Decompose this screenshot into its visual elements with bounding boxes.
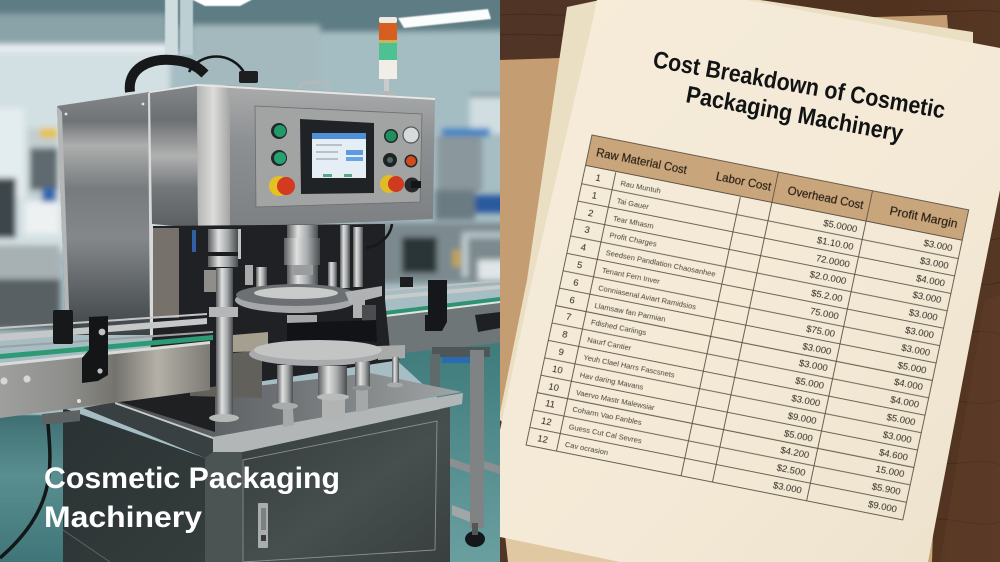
profit margin values: $4.600 [878, 447, 909, 464]
kraft paper left [500, 58, 560, 415]
row numbers: 3 [583, 224, 591, 236]
rotary disc upper [235, 284, 382, 323]
lower bracket [190, 350, 262, 398]
overhead cost values: $2.0.000 [809, 269, 847, 287]
row item labels: Tenant Fern Inver [601, 266, 661, 286]
document heading: Cost Breakdown of Cosmetic [651, 46, 947, 124]
beam connector and cable [0, 410, 80, 558]
overhead cost values: $3.000 [798, 358, 829, 374]
row numbers: 10 [547, 381, 560, 394]
profit margin values: $3.000 [882, 430, 913, 446]
cabinet door handle [258, 503, 268, 548]
right conveyor [377, 277, 500, 353]
row item labels [564, 179, 731, 470]
back plate [153, 228, 179, 318]
control box [150, 84, 435, 228]
overhead cost values: $3.000 [790, 393, 821, 409]
row item labels: Fdished Cariings [590, 317, 647, 337]
row numbers: 5 [576, 260, 583, 271]
control plate [255, 106, 422, 207]
panel: machine photograph [0, 0, 520, 562]
profit margin values: $4.000 [915, 273, 946, 289]
touch screen [300, 119, 374, 194]
floor right [399, 343, 500, 562]
row numbers: 2 [587, 208, 594, 220]
table header band: Labor Cost [715, 169, 773, 194]
profit margin values: $3.000 [923, 238, 953, 254]
rotary disc lower [249, 340, 405, 366]
cable gland cap [239, 71, 258, 83]
mechanism backdrop [150, 224, 400, 386]
row item labels: Guess Cut Cal Sevres [568, 422, 643, 445]
row numbers: 12 [536, 433, 549, 446]
left conveyor [0, 313, 213, 418]
row numbers: 9 [557, 347, 565, 358]
document heading: Packaging Machinery [684, 81, 906, 148]
row item labels: Naurf Cantier [586, 335, 633, 353]
row numbers [536, 172, 604, 446]
row item labels: Coharm Vao Fanbles [572, 405, 643, 427]
title: cosmetic packaging machinery: Machinery [44, 501, 202, 534]
overhead cost values: $3.000 [772, 480, 803, 496]
row numbers: 6 [568, 295, 576, 307]
signal tower light [379, 17, 397, 95]
lower columns [272, 357, 403, 410]
row numbers: 1 [594, 173, 602, 184]
row numbers: 1 [591, 190, 598, 202]
profit margin values: 15.000 [875, 464, 905, 480]
profit margin values: $3.000 [912, 290, 942, 306]
cable: thin black wire [189, 56, 245, 74]
conveyor leg [430, 347, 500, 547]
row item labels: Rau Muntuh [620, 179, 662, 195]
overhead cost values: $1.10.00 [816, 235, 854, 253]
wood desk [500, 0, 1000, 562]
kraft paper bottom [505, 535, 630, 562]
row numbers: 11 [544, 398, 556, 411]
beam plate behind post [233, 332, 268, 352]
ceiling lights [187, 0, 491, 28]
table header band: Profit Margin [888, 204, 959, 231]
dark linkage [287, 320, 377, 342]
cabinet under-edge shadow [120, 392, 215, 432]
row numbers: 12 [540, 416, 553, 428]
overhead cost values: 75.000 [809, 306, 840, 322]
overhead cost values [764, 217, 858, 496]
row item labels: Tear Mhasm [612, 214, 655, 231]
rail bracket rear [53, 310, 73, 344]
cabinet [63, 407, 450, 562]
row item labels: Yeuh Clael Harrs Fascsnets [583, 353, 676, 380]
main vertical post [209, 268, 239, 422]
row item labels: Tai Gauer [616, 196, 650, 211]
row item labels: Vaervo Mastr Malewsiar [575, 388, 656, 412]
profit margin values: $5.000 [897, 360, 927, 377]
overhead cost values: $5.000 [783, 428, 814, 445]
profit margin values: $3.000 [900, 343, 931, 359]
row item labels: Hav daring Mavans [579, 370, 644, 392]
cable: thick black conduit [130, 60, 205, 92]
ceiling column [165, 0, 193, 55]
profit margin values: $3.000 [919, 255, 950, 272]
row item labels: Profit Charges [609, 230, 658, 249]
hub ring [292, 342, 326, 348]
main sheet [500, 0, 1000, 562]
overhead cost values: $4.200 [779, 445, 810, 461]
back sheet [500, 0, 973, 562]
row item labels: Conniasenal Aviart Ramidsios [597, 283, 697, 311]
table header band: Overhead Cost [786, 183, 865, 212]
title: cosmetic packaging machinery [44, 462, 340, 534]
profit margin values: $5.900 [871, 481, 902, 498]
row item labels: Llamsaw fan Parmian [594, 301, 666, 324]
table header band [586, 135, 969, 240]
left side panel of machine [57, 92, 154, 335]
blurred blue crate [442, 357, 470, 364]
kraft sheet bottom right [920, 470, 935, 562]
row numbers: 6 [572, 277, 580, 289]
panel: cost document on wood desk [500, 0, 1000, 562]
row item labels: Seedsen Pandlation Chaosanhee [605, 248, 716, 279]
profit margin values: $3.000 [904, 325, 935, 341]
overhead cost values: $2.500 [776, 462, 806, 479]
cost table [526, 135, 969, 520]
overhead cost values: $9.000 [787, 411, 817, 427]
rail bracket front [82, 316, 108, 383]
kraft paper top right [840, 15, 948, 50]
profit margin values: $3.000 [908, 307, 939, 324]
row numbers: 7 [565, 311, 572, 323]
profit margin values: $4.000 [889, 394, 920, 411]
table header band: Raw Material Cost [595, 145, 689, 177]
profit margin values: $9.000 [867, 499, 898, 515]
profit margin values [867, 238, 953, 515]
table grid [526, 135, 969, 520]
overhead cost values: $5.2.00 [810, 288, 843, 305]
floor left [0, 415, 70, 562]
overhead cost values: $5.000 [794, 375, 825, 392]
steel table top [83, 373, 463, 458]
profit margin values: $4.000 [893, 377, 924, 393]
overhead cost values: $3.000 [801, 341, 832, 358]
overhead cost values: $5.0000 [822, 218, 858, 235]
panel buttons [269, 123, 421, 196]
top handle [300, 82, 330, 90]
row numbers: 8 [561, 329, 569, 341]
profit margin values: $5.000 [886, 412, 916, 428]
overhead cost values: 72.0000 [815, 253, 851, 271]
overhead cost values: $75.00 [805, 324, 836, 340]
title: cosmetic packaging machinery: Cosmetic Packaging [44, 462, 340, 495]
row item labels: Cav ocrasion [564, 440, 609, 457]
row numbers: 10 [551, 364, 564, 377]
machined columns [192, 224, 392, 299]
row numbers: 4 [580, 242, 587, 254]
factory background [0, 0, 500, 458]
